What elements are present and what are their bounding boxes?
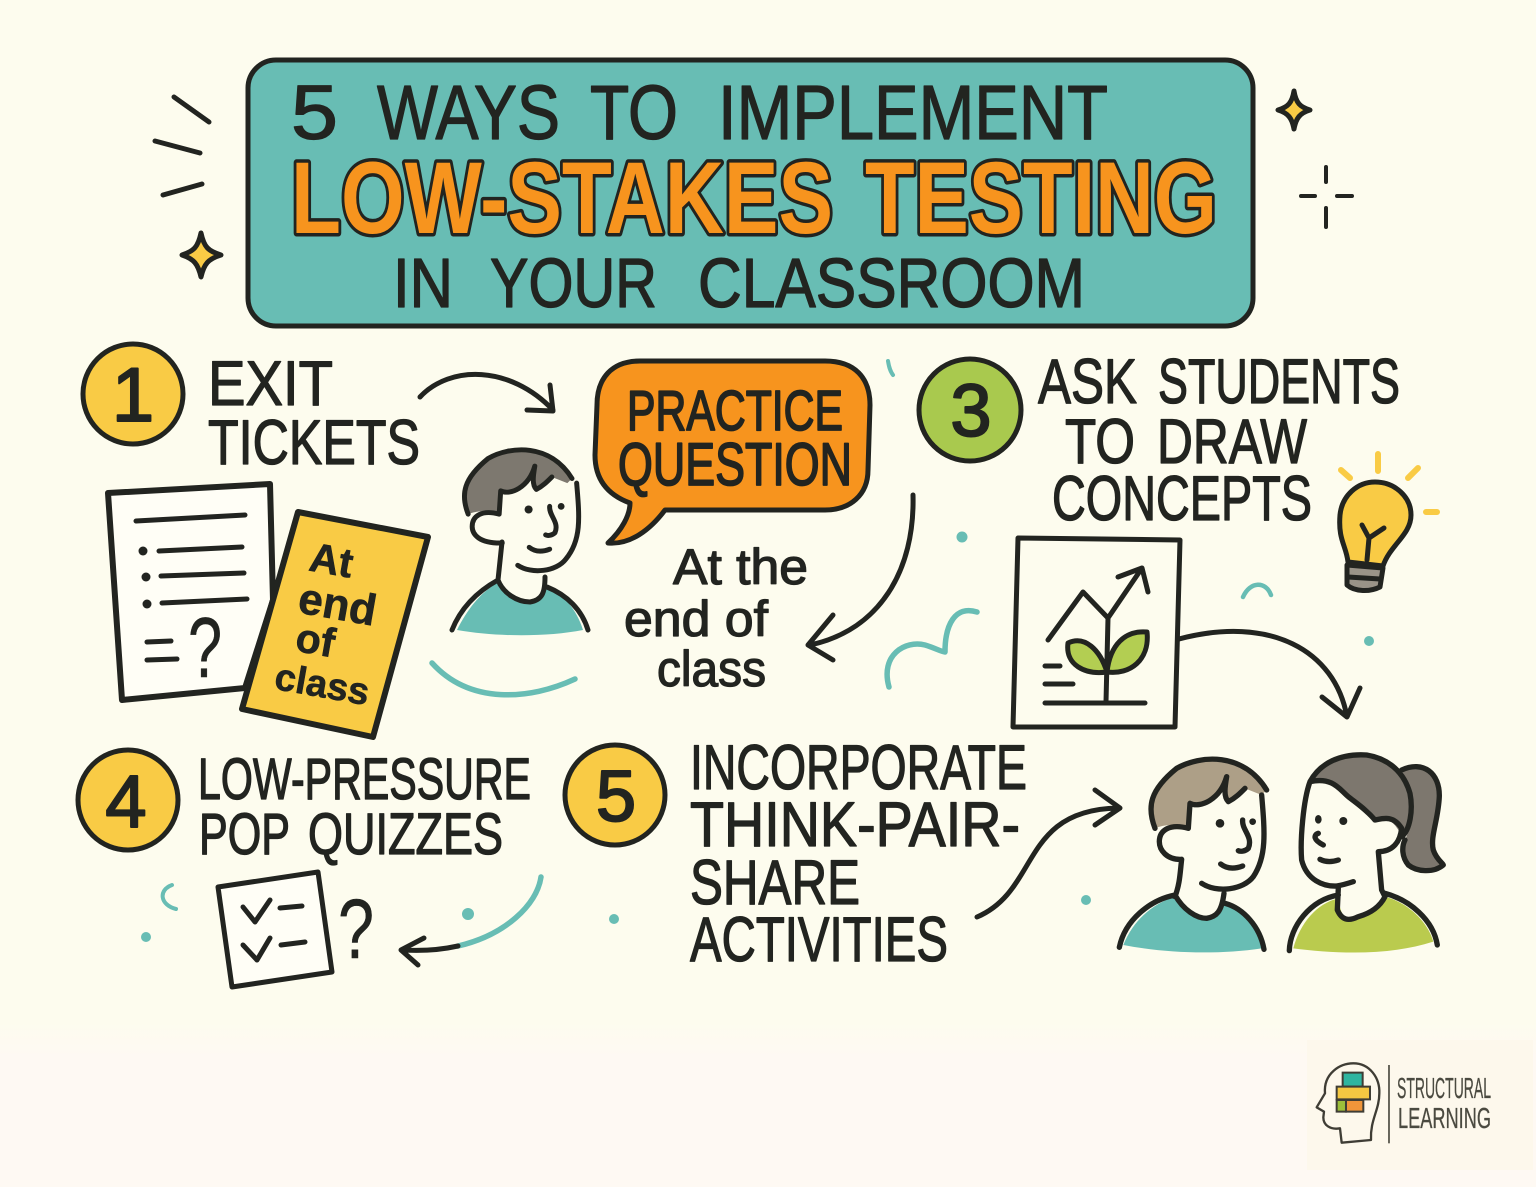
heading: incorporate think-pair-share activities: THINK-PAIR- (690, 790, 1020, 860)
person with speech bubble (432, 361, 870, 697)
heading: exit tickets: EXIT (208, 349, 333, 419)
title line 2 highlighted: TESTING (865, 141, 1217, 255)
caption: at the end of class (624, 539, 808, 697)
speech bubble: practice question (595, 361, 870, 543)
icon: boy (1119, 759, 1267, 952)
icon: quiz checklist: ? (338, 882, 374, 976)
item 3: ask students to draw concepts (919, 347, 1437, 727)
badge 4: 4 (105, 760, 147, 843)
item 4: low-pressure pop quizzes (78, 747, 619, 987)
badge 1 (83, 344, 183, 444)
icon: student bust (452, 450, 588, 635)
title line 2 highlighted: LOW-STAKES (291, 141, 833, 255)
item 1: exit tickets (83, 344, 428, 737)
title line 1: IMPLEMENT (718, 70, 1108, 156)
decorative dashes and sparkles around title (155, 91, 1352, 277)
doodles and arrow (141, 877, 619, 965)
icon: yellow card with text: of (292, 614, 339, 666)
title banner (248, 60, 1253, 326)
caption: at the end of class: class (657, 641, 766, 697)
title line 3 (393, 244, 1085, 322)
arrow from drawing to pair (1179, 631, 1360, 717)
logo icon: head with blocks (1317, 1063, 1389, 1143)
heading: incorporate think-pair-share activities: INCORPORATE (690, 733, 1027, 803)
icon: girl (1289, 755, 1443, 953)
icon: question sheet (108, 484, 273, 700)
heading: low-pressure pop quizzes: QUIZZES (308, 802, 503, 867)
heading: exit tickets: TICKETS (208, 408, 420, 478)
caption: at the end of class: end of (624, 591, 768, 647)
title line 1: WAYS (377, 70, 560, 156)
heading: low-pressure pop quizzes: POP (199, 802, 290, 867)
heading: low-pressure pop quizzes (198, 747, 531, 867)
icon: yellow card with text: At (306, 534, 357, 587)
teal doodles centre (887, 361, 977, 687)
badge 3: 3 (950, 369, 992, 452)
badge 5 (565, 745, 665, 845)
heading: ask students to draw concepts: ASK (1038, 347, 1137, 417)
speech bubble: practice question: QUESTION (618, 431, 852, 498)
logo: structural learning (1307, 1040, 1533, 1170)
item 5: think-pair-share (565, 733, 1443, 975)
title line 3: YOUR (490, 244, 657, 322)
icon: yellow card with text (242, 512, 428, 737)
icon: yellow card with text: class (272, 656, 373, 714)
badge 3 (919, 359, 1021, 461)
heading: incorporate think-pair-share activities: SHARE (690, 848, 860, 918)
title line 1: 5 (291, 70, 338, 156)
icon: plant and growth chart drawing (1013, 538, 1180, 727)
icon: lightbulb (1340, 454, 1437, 591)
title line 1 (291, 70, 1108, 156)
arrow from bubble caption (808, 495, 913, 660)
teal doodles right (1243, 585, 1374, 646)
logo wordmark (1397, 1073, 1491, 1135)
heading: ask students to draw concepts: TO (1065, 407, 1135, 477)
heading: exit tickets (208, 349, 420, 478)
heading: ask students to draw concepts: STUDENTS (1158, 347, 1400, 417)
title line 1: TO (590, 70, 678, 156)
heading: ask students to draw concepts: DRAW (1157, 407, 1307, 477)
icon: yellow card with text: end (295, 574, 380, 636)
heading: low-pressure pop quizzes: LOW-PRESSURE (198, 747, 531, 812)
badge 5: 5 (596, 757, 636, 837)
heading: incorporate think-pair-share activities (690, 733, 1027, 975)
heading: ask students to draw concepts: CONCEPTS (1052, 464, 1312, 534)
speech bubble: practice question: PRACTICE (627, 379, 843, 443)
icon: question sheet: ? (188, 601, 222, 696)
icon: quiz checklist (218, 872, 374, 987)
title line 3: IN (393, 244, 453, 322)
badge 4 (78, 750, 178, 850)
title line 3: CLASSROOM (698, 244, 1085, 322)
heading: incorporate think-pair-share activities: ACTIVITIES (690, 905, 948, 975)
arrow to pair (977, 790, 1120, 917)
badge 1: 1 (112, 353, 154, 438)
arrow from exit tickets to person (420, 374, 553, 411)
teal swoosh under person (432, 663, 575, 695)
caption: at the end of class: At the (673, 539, 808, 595)
heading: ask students to draw concepts (1038, 347, 1400, 534)
